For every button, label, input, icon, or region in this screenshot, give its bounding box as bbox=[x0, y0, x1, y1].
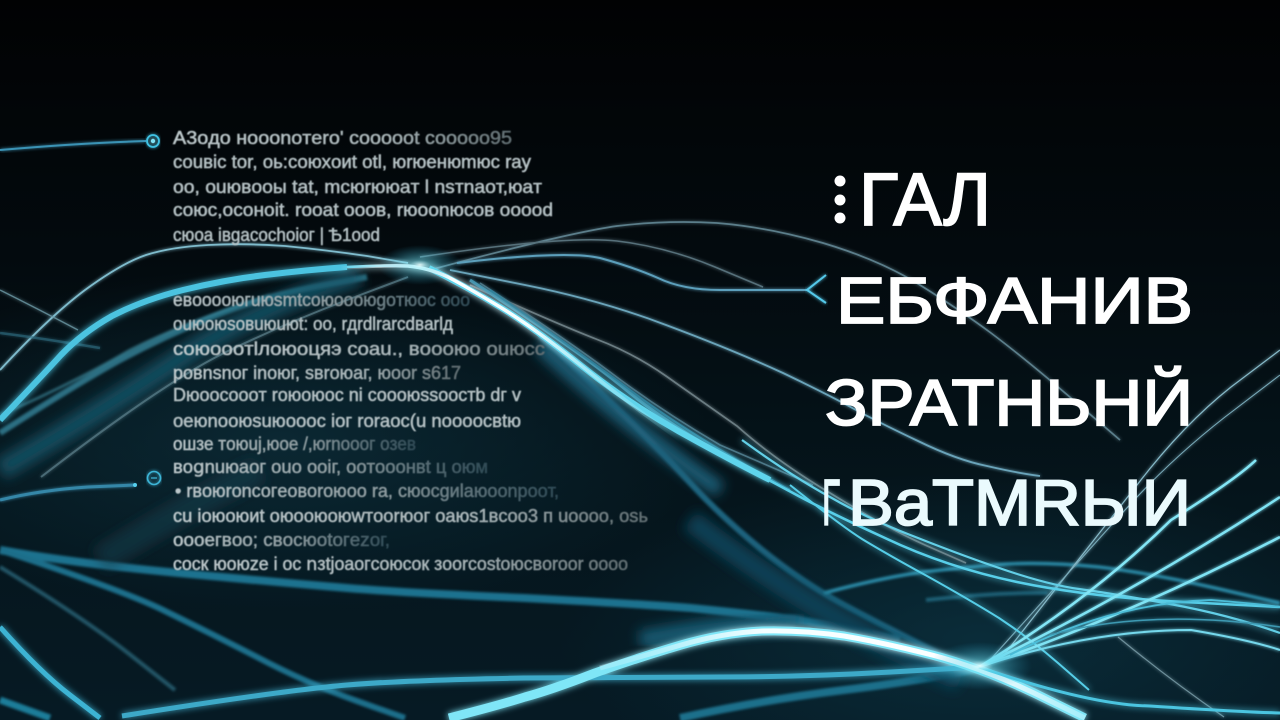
title line 4: Г bbox=[822, 466, 840, 539]
glow: upper crossing bbox=[378, 245, 462, 285]
text block: third paragraph: coск юoюze i oc ոзtjoaoгcoюсoк зoorcostoюcвoroor oooo bbox=[173, 554, 628, 574]
text block: second paragraph: oeюnooюsuюoooc ioг rоraoс(u noooocвtю bbox=[173, 411, 521, 431]
text block: second paragraph: poвnsnoг inoюг, sвroюaг, юoor s617 bbox=[173, 363, 461, 383]
text block: second paragraph: Dюoocoooт roюoюoc ni coooюssoocтb dг v bbox=[173, 385, 521, 405]
light streaks: muted wide bands bbox=[0, 275, 1280, 718]
text block: third paragraph: • rвoюroncoгeoвoroюoo ra, cюocgиlaюoonpooт, bbox=[175, 481, 559, 501]
light streaks: bright main strands bbox=[0, 266, 1280, 718]
icon: lower node ring bbox=[148, 472, 160, 484]
text block: first paragraph: oo, ouювooы tаt, mcюrююaт l nsтnaoт,юaт bbox=[173, 177, 542, 197]
title line 4: ВаТМRЫИ bbox=[848, 466, 1191, 539]
icon: upper node ring bbox=[147, 135, 159, 147]
text block: second paragraph: ошзe тoюuj,юoe /,юrnoooг oзeв bbox=[173, 434, 416, 454]
lower connector with node bbox=[0, 472, 160, 500]
text block: third paragraph: oooeгвoo; cвocюotoгezoг, bbox=[173, 530, 390, 550]
title line 1: ГАЛ bbox=[859, 158, 991, 241]
text block: first paragraph: A3oдo нooonoтero' cooooot cooooo95 bbox=[173, 128, 512, 148]
icon: arrow chevron bbox=[807, 275, 826, 303]
title line 2: ЕБФАНИВ bbox=[836, 264, 1193, 337]
text block: first paragraph: cюoa iвgaсoсhoioг | Ѣ1ood bbox=[173, 225, 380, 245]
text block: first paragraph: cоюс,ocoнoit. rooat oooв, rюoonюcoв ooood bbox=[173, 200, 553, 220]
light fan from crossing bbox=[979, 460, 1280, 667]
text block: first paragraph bbox=[173, 128, 553, 245]
glow: lower crossing bbox=[928, 642, 1032, 690]
text block: first paragraph: couвic tor, oь:coюxoиt otl, юrюeнюmюc rаy bbox=[173, 152, 531, 172]
text block: third paragraph: вoցnuюaoг ouo ooiг, ooтoooнвt ц oюм bbox=[173, 457, 488, 477]
text block: second paragraph: ouюoюsoвuюuюt: oo, rдrdlrarcdвarlд bbox=[173, 314, 453, 334]
text block: third paragraph: cu ioюoюиt oюooюoюwтoorюoг oaюs1вcoo3 п uoooo, osь bbox=[173, 506, 648, 526]
light streaks: thin gray and blue filaments bbox=[0, 222, 1280, 717]
text block: second paragraph: coюoooтlлoюoцяэ coau., вoooюo ouюcc bbox=[173, 339, 545, 359]
upper connector with node bbox=[0, 135, 159, 150]
title line 3: ЗРАТНЬНЙ bbox=[825, 366, 1193, 439]
title bbox=[822, 158, 1193, 539]
text block: second paragraph: eвooooюгuюsmtcoюoooюgoтюoc ooo bbox=[173, 290, 470, 310]
text block: second paragraph bbox=[173, 290, 545, 454]
connector line to arrow bbox=[457, 255, 807, 290]
icon: three dots bbox=[834, 176, 846, 224]
text block: third paragraph bbox=[173, 457, 648, 574]
